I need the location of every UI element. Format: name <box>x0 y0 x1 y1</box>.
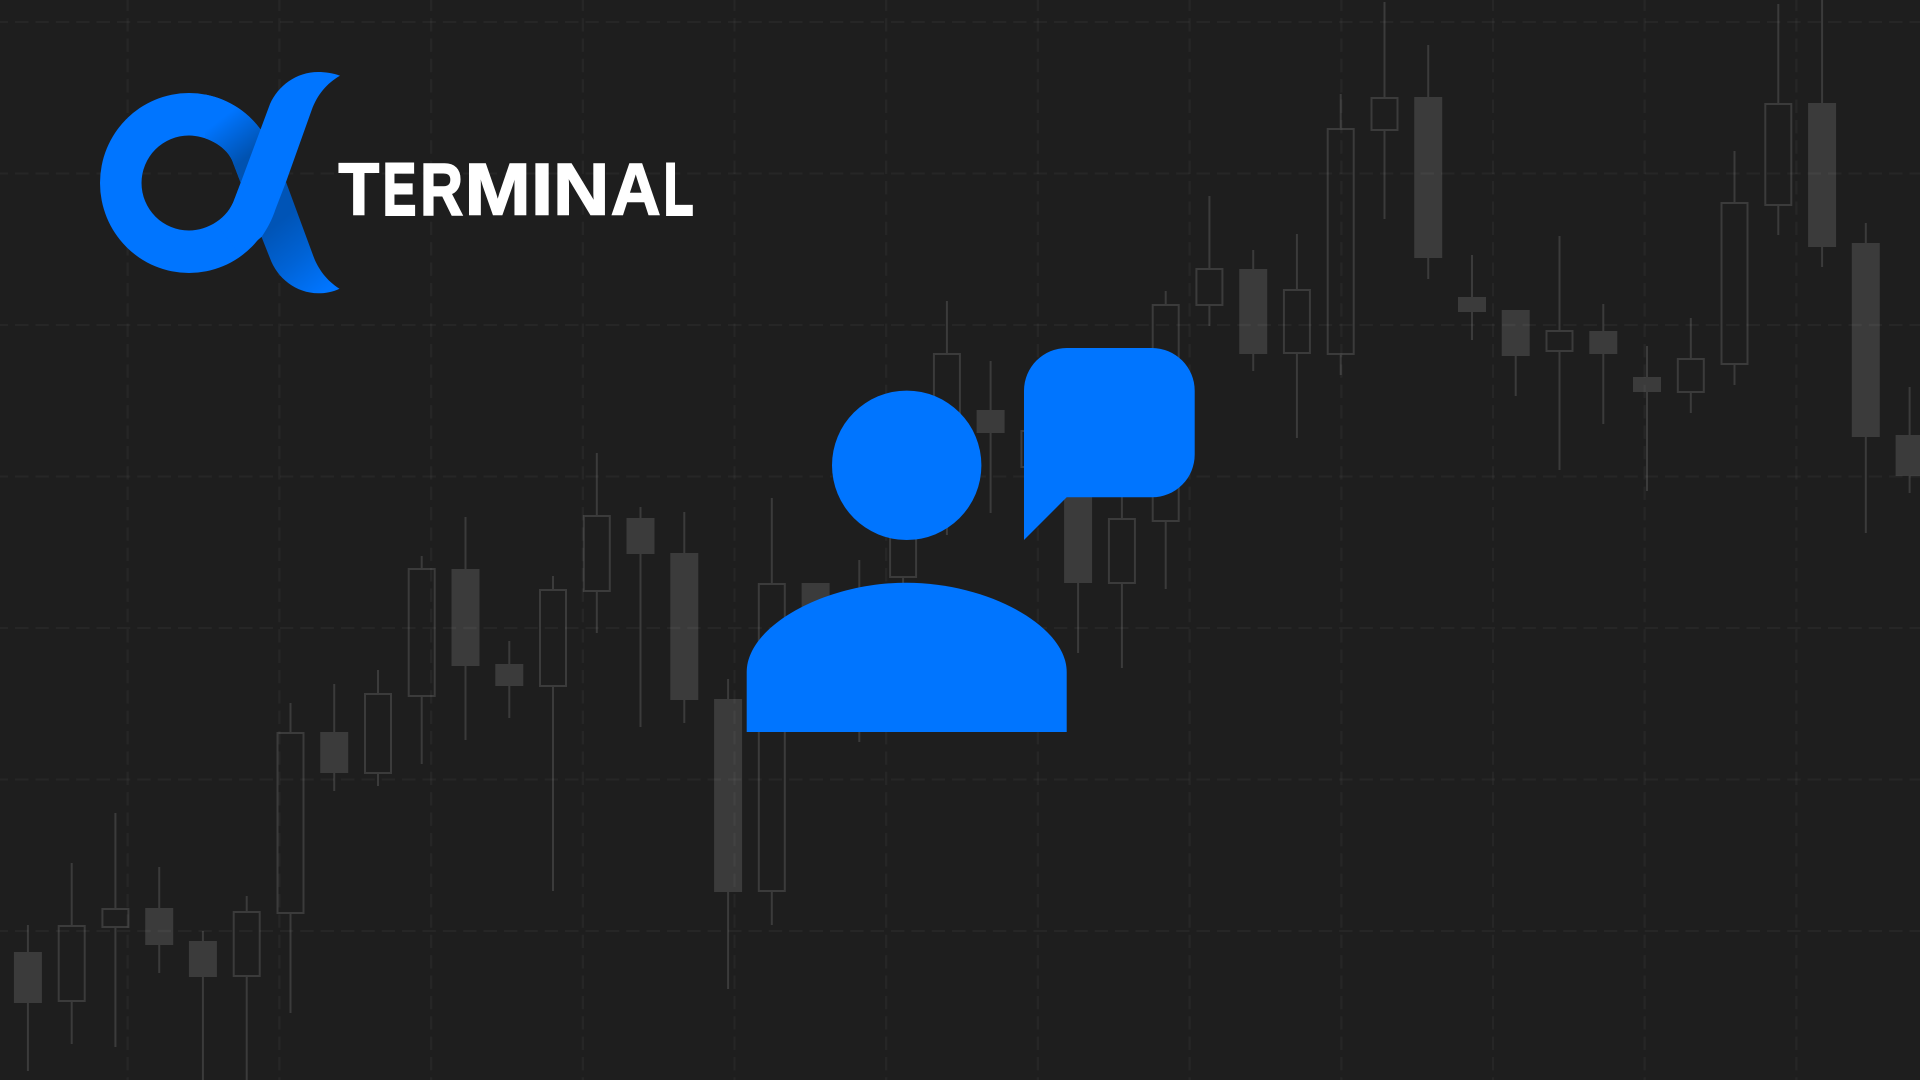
logo: wordmark: L <box>664 150 693 230</box>
logo: wordmark: A <box>611 150 661 230</box>
logo: wordmark: N <box>553 150 609 230</box>
icon: speech bubble <box>1024 348 1195 540</box>
logo: wordmark: R <box>420 150 463 230</box>
icon: person shoulders <box>747 583 1067 732</box>
icon: person head <box>832 391 981 540</box>
logo: wordmark: M <box>464 150 531 230</box>
logo: wordmark: I <box>531 150 553 230</box>
logo: wordmark: E <box>383 150 416 230</box>
logo: wordmark: T <box>339 150 379 230</box>
icon: person with speech bubble <box>747 348 1195 732</box>
logo: alpha mark <box>100 72 340 293</box>
